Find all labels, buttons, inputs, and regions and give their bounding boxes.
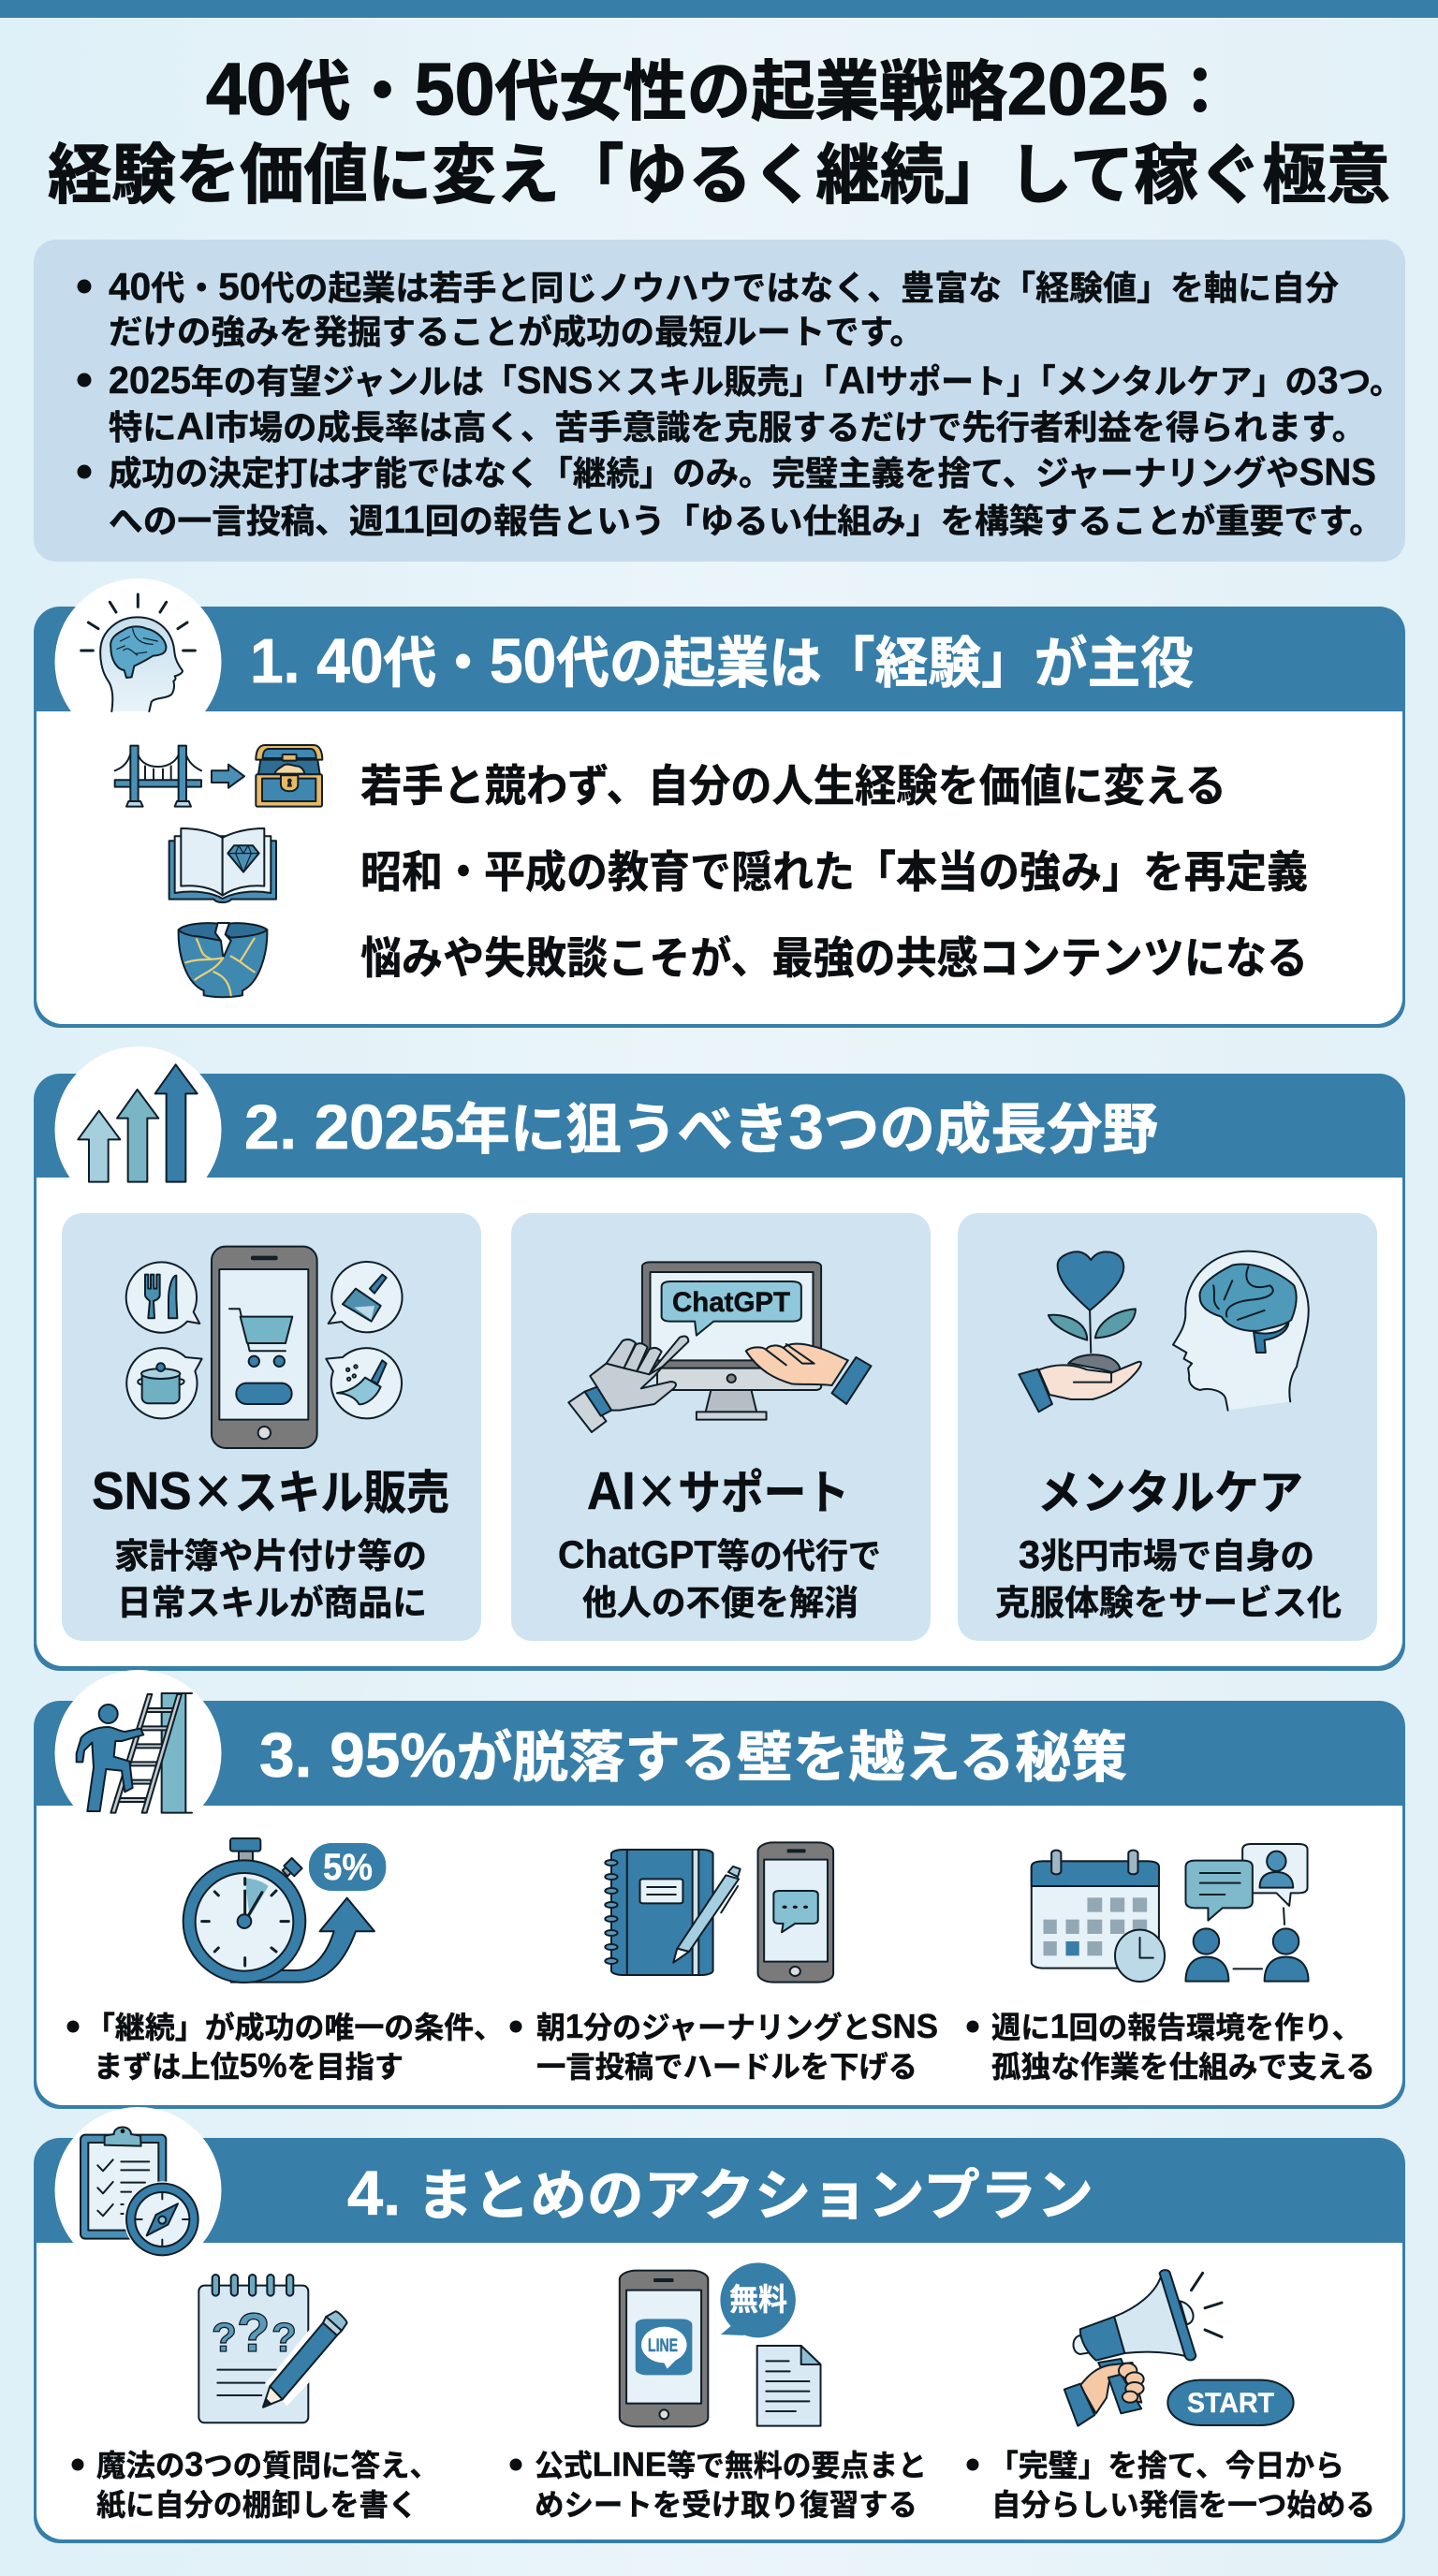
text: bullet 3: 孤独な作業を仕組みで支える — [991, 2050, 1375, 2084]
panel: summary: 特にAI市場の成長率は高く、苦手意識を克服するだけで先行者利益を得られます。 — [109, 404, 1366, 447]
text: bullet 2 — [509, 2007, 938, 2084]
card title: AI×サポート — [587, 1456, 849, 1523]
text: bullet 2: 一言投稿でハードルを下げる — [536, 2050, 917, 2084]
section 1 heading: 1. 40代・50代の起業は「経験」が主役 — [250, 627, 1194, 696]
panel: summary: への一言投稿、週11回の報告という「ゆるい仕組み」を構築することが重要です。 — [109, 498, 1384, 541]
card description: 3兆円市場で自身の — [1019, 1532, 1314, 1576]
card description: 日常スキルが商品に — [117, 1584, 427, 1622]
icon: person climbing ladder — [77, 1693, 192, 1813]
card: mental care — [958, 1213, 1377, 1641]
card title: メンタルケア — [1037, 1467, 1303, 1519]
panel: summary: だけの強みを発掘することが成功の最短ルートです。 — [109, 313, 924, 351]
text: row 1: 若手と競わず、自分の人生経験を価値に変える — [360, 761, 1226, 811]
icon: heart plant and head — [1019, 1251, 1309, 1412]
section 2 heading: 2. 2025年に狙うべき3つの成長分野 — [244, 1093, 1158, 1163]
icon: notepad with question marks and pencil: ? — [237, 2303, 270, 2364]
icon: calendar and report chat — [1032, 1844, 1309, 1982]
icon: notepad with question marks and pencil: ? — [271, 2315, 297, 2361]
icon: stopwatch with 5% arrow — [183, 1838, 386, 1983]
text: bullet 3: 週に1回の報告環境を作り、 — [991, 2007, 1361, 2045]
card description — [114, 1537, 427, 1622]
icon: stopwatch with 5% arrow: 5% — [323, 1847, 373, 1888]
card: SNS skill sales — [62, 1213, 481, 1641]
text: bullet 1 — [71, 2445, 439, 2522]
text: bullet 1 — [67, 2011, 504, 2085]
icon: head with brain — [81, 594, 195, 711]
card description: 克服体験をサービス化 — [995, 1584, 1342, 1622]
text: bullet 2: 朝1分のジャーナリングとSNS — [536, 2007, 938, 2045]
text: bullet 1: まずは上位5%を目指す — [94, 2046, 404, 2085]
section 4 heading: 4. まとめのアクションプラン — [347, 2159, 1093, 2229]
text: bullet 1: 魔法の3つの質問に答え、 — [96, 2445, 439, 2483]
card description — [995, 1532, 1342, 1622]
panel: summary — [34, 240, 1405, 562]
card: AI support — [511, 1213, 931, 1641]
icon: phone with LINE, free badge and document — [620, 2262, 821, 2426]
icon: monitor with robot and human hand: ChatGPT — [672, 1287, 790, 1318]
text: bullet 3: 自分らしい発信を一つ始める — [991, 2488, 1375, 2522]
icon: phone with cart and skills — [126, 1247, 403, 1448]
icon: notebook, pen and phone — [605, 1842, 833, 1983]
panel: section 4 — [34, 2107, 1405, 2543]
card description: ChatGPT等の代行で — [558, 1532, 881, 1576]
text: bullet 2 — [509, 2445, 927, 2522]
title: 40代・50代女性の起業戦略2025： — [206, 47, 1232, 130]
icon: notepad with question marks and pencil — [198, 2275, 349, 2422]
text: bullet 3: 「完璧」を捨て、今日から — [989, 2449, 1344, 2482]
icon: notepad with question marks and pencil: ? — [212, 2315, 237, 2361]
icon: megaphone with START button: START — [1187, 2388, 1274, 2419]
icon: book with diamond — [169, 828, 276, 902]
title: 経験を価値に変え「ゆるく継続」して稼ぐ極意 — [48, 139, 1390, 212]
card description — [558, 1532, 881, 1622]
text: bullet 2: めシートを受け取り復習する — [535, 2488, 917, 2522]
text: bullet 1: 「継続」が成功の唯一の条件、 — [85, 2011, 504, 2044]
icon: clipboard and compass — [81, 2127, 200, 2258]
panel: section 1 — [34, 578, 1405, 1028]
panel: summary: 40代・50代の起業は若手と同じノウハウではなく、豊富な「経験値」を軸に自分 — [109, 265, 1339, 308]
text: bullet 3 — [966, 2449, 1375, 2522]
panel: summary: 2025年の有望ジャンルは「SNS×スキル販売」「AIサポート」「メンタルケア」の3つ。 — [109, 355, 1402, 403]
card description: 家計簿や片付け等の — [114, 1537, 427, 1575]
text: row 3: 悩みや失敗談こそが、最強の共感コンテンツになる — [360, 933, 1308, 983]
card description: 他人の不便を解消 — [582, 1584, 858, 1622]
text: bullet 2: 公式LINE等で無料の要点まと — [535, 2445, 927, 2483]
icon: growth arrows — [78, 1064, 198, 1182]
title — [48, 47, 1390, 212]
icon: bridge to treasure chest — [115, 745, 322, 807]
panel: section 2 — [34, 1046, 1405, 1671]
icon: phone with LINE, free badge and document: LINE — [648, 2336, 678, 2356]
text: row 2: 昭和・平成の教育で隠れた「本当の強み」を再定義 — [360, 847, 1308, 897]
text: bullet 3 — [966, 2007, 1375, 2084]
icon: monitor with robot and human hand — [568, 1262, 871, 1432]
panel: section 3 — [34, 1670, 1405, 2109]
panel: summary: 成功の決定打は才能ではなく「継続」のみ。完璧主義を捨て、ジャーナリングやSNS — [109, 450, 1376, 493]
card title: SNS×スキル販売 — [92, 1456, 449, 1523]
top bar — [0, 0, 1438, 18]
icon: phone with LINE, free badge and document: 無料 — [729, 2282, 787, 2317]
text: bullet 1: 紙に自分の棚卸しを書く — [96, 2488, 418, 2522]
icon: kintsugi bowl — [179, 923, 267, 997]
icon: megaphone with START button — [1064, 2270, 1294, 2426]
section 3 heading: 3. 95%が脱落する壁を越える秘策 — [259, 1721, 1127, 1791]
